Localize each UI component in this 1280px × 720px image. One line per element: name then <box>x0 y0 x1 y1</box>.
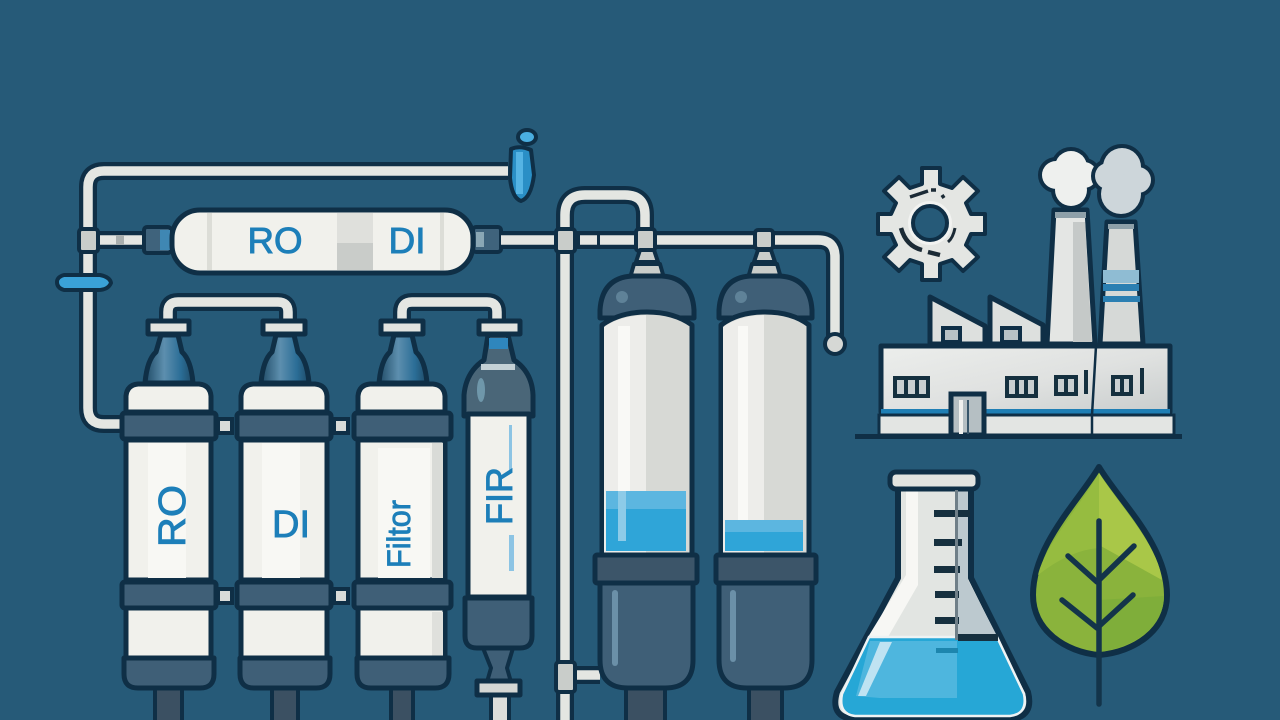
water in flask <box>841 637 1025 716</box>
label: RO: RO <box>248 220 302 261</box>
connector: membrane left <box>144 227 171 253</box>
label: RO: RO <box>152 485 194 547</box>
smokestack 2 <box>1100 222 1143 344</box>
smoke cloud 1 <box>1042 151 1097 206</box>
tank 2 <box>716 250 816 688</box>
filter cartridge 2: DI <box>237 321 331 688</box>
windows <box>895 368 1142 396</box>
connector: membrane right <box>473 227 501 252</box>
horizontal RO / DI membrane <box>172 210 473 273</box>
icon: green leaf <box>1033 467 1167 704</box>
measurement ticks <box>934 510 998 653</box>
label: DI: DI <box>388 220 426 261</box>
label: AIR: FIR <box>479 467 520 525</box>
pipe: top return line <box>88 171 508 424</box>
pipe: left feed into horizontal membrane <box>79 229 150 252</box>
label: DI: DI <box>272 504 310 546</box>
smokestack 1 <box>1047 210 1095 344</box>
filter cartridge 3: Filter <box>354 321 451 688</box>
icon: top valve <box>510 130 536 201</box>
stems under filters <box>155 686 413 720</box>
icon: laboratory flask <box>835 472 1029 719</box>
flask rim <box>890 472 978 489</box>
pipe: bridge between filters 3 and 4 <box>402 302 497 322</box>
door <box>951 394 984 435</box>
sawtooth roof 1 <box>930 297 985 344</box>
icon: factory <box>855 148 1182 439</box>
building wall <box>881 346 1170 412</box>
label: Filter: Filtor <box>381 500 417 568</box>
smoke cloud 2 <box>1095 148 1151 214</box>
pipe: right header and outlet <box>501 232 845 354</box>
pipe: bridge between filters 1 and 2 <box>168 302 288 322</box>
filter cartridge 4: AIR <box>464 321 533 720</box>
ground line <box>855 434 1182 439</box>
sawtooth roof 2 <box>990 297 1043 344</box>
connectors between filters <box>218 419 348 603</box>
pipe: loop and vertical riser <box>556 195 773 720</box>
filter cartridge 1: RO <box>122 321 216 688</box>
icon: left valve handle <box>57 275 111 290</box>
stems under tanks <box>626 686 782 720</box>
lower plinth <box>879 415 1174 435</box>
roof windows <box>943 328 1020 342</box>
icon: gear <box>878 168 985 280</box>
blue stripe <box>881 409 1170 415</box>
leaf veins and stem <box>1062 521 1134 704</box>
wall crack <box>1092 346 1096 434</box>
tank 1 <box>595 250 697 688</box>
